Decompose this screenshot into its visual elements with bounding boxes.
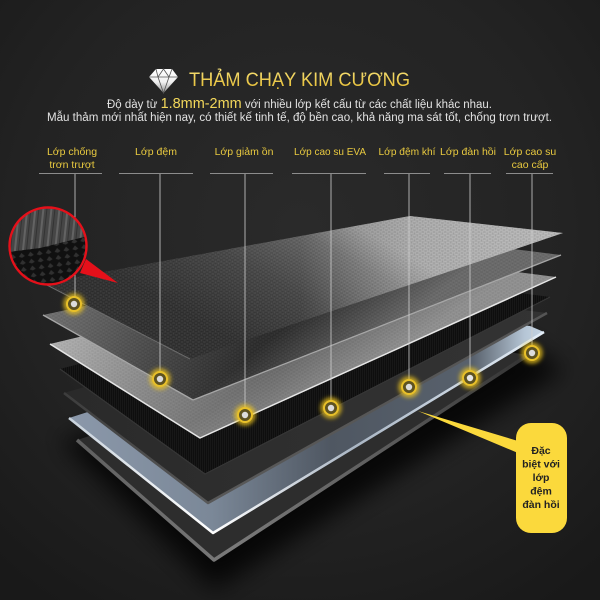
icon: diamond [149, 69, 178, 93]
magnifier ring [10, 208, 86, 284]
layer 3: sound dampening [50, 258, 556, 438]
label: Lớp đệm khí: Lớp đệm khí [378, 146, 436, 158]
layer labels [47, 146, 556, 171]
subtitle line 1: Độ dày từ 1.8mm-2mm với nhiều lớp kết cấu từ các chất liệu khác nhau. [107, 96, 492, 112]
layer 5: air cushion [64, 295, 547, 503]
marker: elastic [462, 370, 478, 386]
layer 7: base rubber [77, 335, 528, 560]
label: Lớp chống trơn trượt: Lớp chống [47, 146, 97, 158]
label: Lớp đệm: Lớp đệm [135, 146, 177, 158]
magnifier callout [8, 206, 118, 286]
label: Lớp cao su cao cấp: cao cấp [512, 159, 549, 171]
layer 2: cushion [43, 236, 561, 400]
callout text: đàn hồi [522, 499, 560, 511]
callout text: lớp [533, 472, 549, 484]
layer 1: anti-slip top [43, 216, 563, 359]
marker: premium rubber [524, 345, 540, 361]
label underlines [39, 172, 553, 174]
label: Lớp đàn hồi: Lớp đàn hồi [440, 146, 496, 158]
layer 6: elastic layer [69, 312, 544, 533]
callout text: Đặc [531, 445, 551, 457]
label: Lớp cao su cao cấp: Lớp cao su [504, 146, 556, 158]
marker: sound dampening [237, 407, 253, 423]
magnified texture [10, 208, 86, 284]
callout text: đệm [530, 486, 552, 498]
title block [47, 68, 552, 124]
mat shadow [60, 340, 565, 590]
marker: cushion [152, 371, 168, 387]
magnifier pointer [80, 259, 118, 283]
yellow callout [418, 411, 567, 533]
layer 4: EVA rubber [60, 278, 550, 474]
leader lines [75, 174, 532, 415]
marker dots [66, 296, 540, 423]
label: Lớp giảm ồn: Lớp giảm ồn [215, 146, 274, 158]
callout box [516, 423, 567, 533]
marker: air cushion [401, 379, 417, 395]
label: Lớp cao su EVA: Lớp cao su EVA [294, 146, 366, 158]
title text: THẢM CHẠY KIM CƯƠNG [189, 68, 410, 91]
marker: anti-slip [66, 296, 82, 312]
marker: EVA [323, 400, 339, 416]
subtitle line 2: Mẫu thảm mới nhất hiện nay, có thiết kế tinh tế, độ bền cao, khả năng ma sát tốt, chống trơn trượt. [47, 111, 552, 124]
label: Lớp chống trơn trượt: trơn trượt [49, 159, 95, 171]
mat layer stack [43, 216, 563, 560]
callout pointer [418, 411, 518, 453]
callout text: biệt với [522, 458, 560, 470]
